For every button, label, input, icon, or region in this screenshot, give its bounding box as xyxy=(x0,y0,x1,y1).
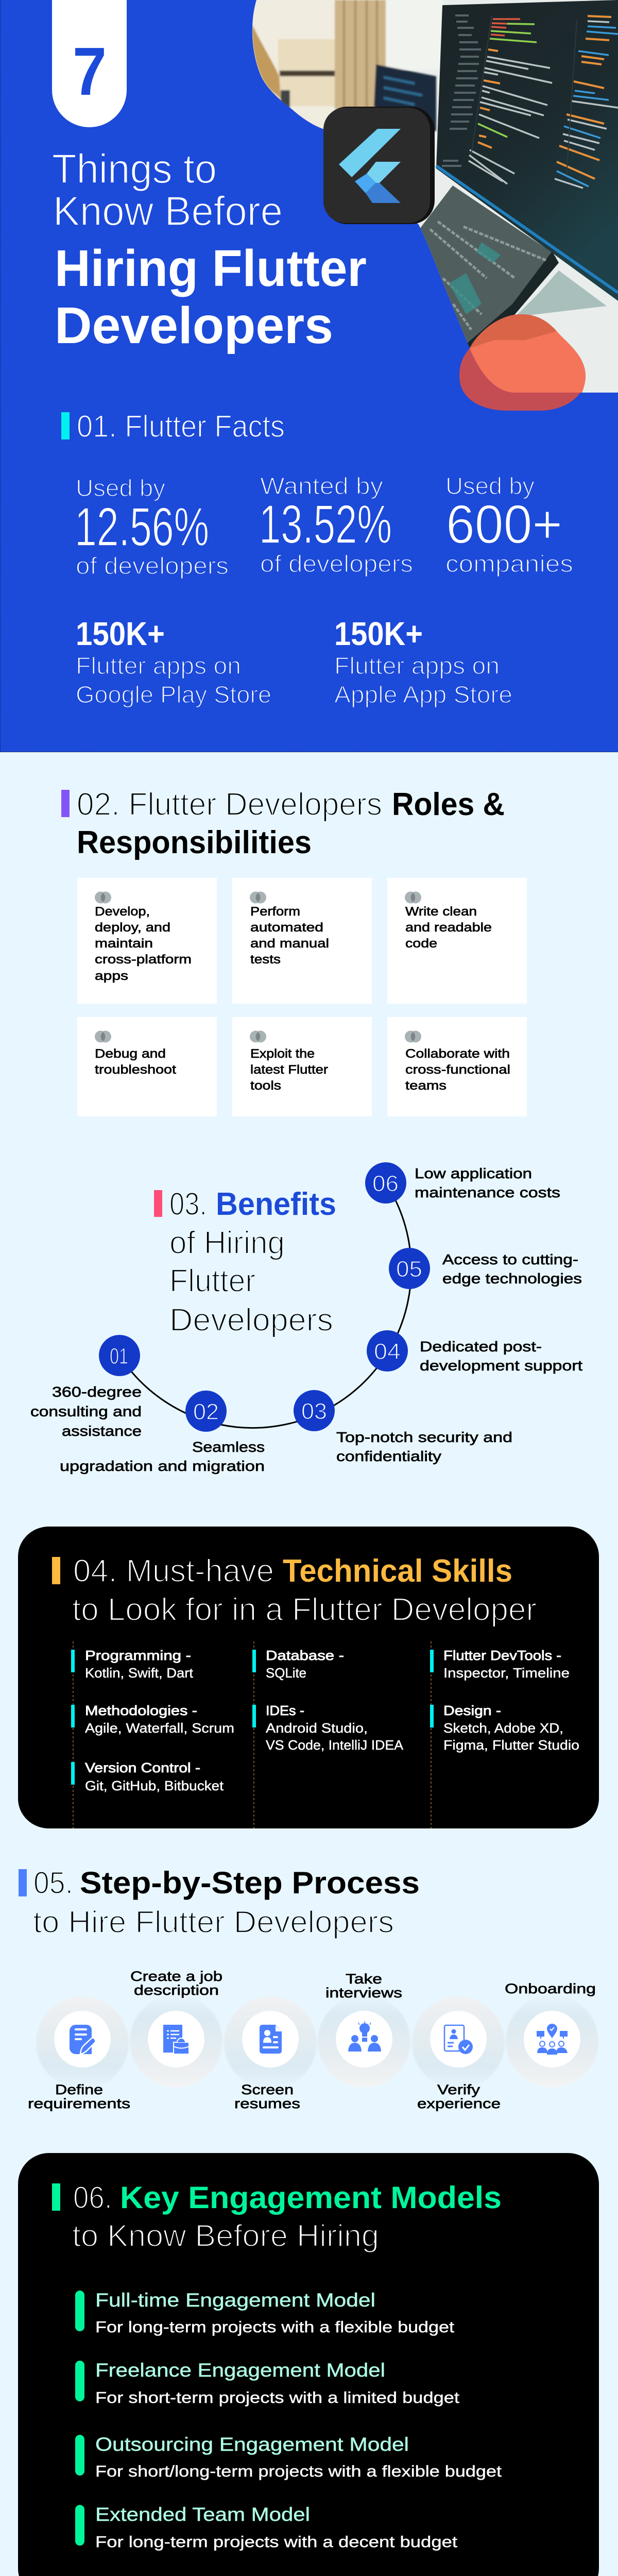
benefit 04: Dedicated post- xyxy=(420,1338,542,1354)
stat: apple app store apps: Apple App Store xyxy=(334,681,512,708)
step 6: onboarding xyxy=(505,1981,596,2067)
step halo rings xyxy=(36,1995,598,2089)
skill: programming: Kotlin, Swift, Dart xyxy=(85,1665,194,1681)
model: outsourcing: For short/long-term projects with a flexible budget xyxy=(95,2462,502,2480)
panel: role card tools: Exploit the xyxy=(250,1047,315,1061)
chart: hiring process steps xyxy=(28,1969,598,2111)
stat: google play store apps: Flutter apps on xyxy=(76,652,241,679)
title: Things to xyxy=(52,146,217,192)
panel: role card test: automated xyxy=(250,921,323,935)
panel: role card code: code xyxy=(405,937,437,951)
step 3: screen resumes xyxy=(234,2011,300,2111)
title: Developers xyxy=(55,297,333,354)
skill: database: SQLite xyxy=(266,1665,306,1681)
stat: used by 600+ companies: 600+ xyxy=(446,494,562,555)
stat: wanted by 13.52% of developers: Wanted by xyxy=(260,472,383,499)
heading: 05 step-by-step process: to Hire Flutter Developers xyxy=(33,1905,394,1939)
skill: flutter devtools xyxy=(430,1648,570,1681)
step 1: define requirements: Define xyxy=(55,2082,103,2097)
model: full-time xyxy=(75,2290,454,2336)
heading: 06 key engagement models xyxy=(52,2180,502,2253)
model: freelance xyxy=(75,2360,459,2406)
benefit 05: edge technologies xyxy=(442,1270,582,1286)
panel: 04 technical skills xyxy=(18,1527,599,1828)
stat: wanted by 13.52% of developers xyxy=(259,472,413,577)
title: Know Before xyxy=(53,188,283,234)
panel: role card collaborate xyxy=(387,1017,527,1116)
skill: programming: Programming - xyxy=(85,1648,191,1663)
model: freelance: For short-term projects with a limited budget xyxy=(95,2388,459,2406)
step 4: take interviews xyxy=(325,1971,402,2067)
heading: 02 roles and responsibilities: Roles & xyxy=(392,787,505,822)
panel: hero and flutter facts xyxy=(0,0,618,752)
stat: wanted by 13.52% of developers: 13.52% xyxy=(259,494,392,555)
benefit 06: Low application xyxy=(415,1165,532,1181)
heading: 06 key engagement models: Key Engagement Models xyxy=(120,2180,502,2215)
icon: overlapping circles xyxy=(405,891,421,904)
skill: IDEs: VS Code, IntelliJ IDEA xyxy=(266,1737,404,1753)
skill: methodologies: Agile, Waterfall, Scrum xyxy=(85,1720,234,1736)
benefit 01: consulting and xyxy=(30,1403,142,1419)
benefit 04 xyxy=(367,1330,582,1374)
skill: IDEs: Android Studio, xyxy=(266,1720,368,1736)
icon: overlapping circles xyxy=(250,1030,266,1043)
benefit 03: confidentiality xyxy=(336,1448,441,1464)
panel: role card tools xyxy=(232,1017,372,1116)
icon: flutter logo badge xyxy=(323,107,435,224)
stat: google play store apps: 150K+ xyxy=(76,615,165,652)
heading: 05 step-by-step process xyxy=(19,1866,420,1939)
panel: role card develop: apps xyxy=(95,969,128,983)
stat: apple app store apps: Flutter apps on xyxy=(334,652,500,679)
panel: role card code xyxy=(387,878,527,1004)
skill: design: Sketch, Adobe XD, xyxy=(443,1720,563,1736)
icon: document and briefcase xyxy=(163,2025,189,2054)
step 5: verify experience: Verify xyxy=(437,2082,480,2097)
panel: role card collaborate: cross-functional xyxy=(405,1063,510,1077)
stat: apple app store apps xyxy=(334,615,512,708)
panel: role card code: Write clean xyxy=(405,905,477,919)
skill: design: Design - xyxy=(443,1703,501,1718)
skill: database: Database - xyxy=(266,1648,344,1663)
step 3: screen resumes: resumes xyxy=(234,2096,300,2111)
hero photo: developer monitors xyxy=(247,0,618,397)
benefit 05: Access to cutting- xyxy=(442,1251,578,1267)
benefit 04: 04 xyxy=(374,1339,401,1364)
heading: 01 flutter facts: 01. Flutter Facts xyxy=(77,409,285,444)
skill: flutter devtools: Inspector, Timeline xyxy=(443,1665,570,1681)
stat: google play store apps xyxy=(76,615,271,708)
badge: number 7: 7 xyxy=(73,33,107,109)
step 4: take interviews: Take xyxy=(346,1971,382,1987)
heading: 03 benefits: of Hiring xyxy=(169,1225,285,1261)
skill: IDEs: IDEs - xyxy=(266,1703,304,1718)
step 2: create a job description xyxy=(130,1969,222,2067)
skill: flutter devtools: Flutter DevTools - xyxy=(443,1648,561,1663)
icon: bulb and two people xyxy=(348,2021,381,2052)
heading: 02 roles and responsibilities: Responsibilities xyxy=(77,825,312,860)
panel: role card develop xyxy=(77,878,217,1004)
stat: used by 12.56% of developers: Used by xyxy=(76,474,165,501)
benefit 01 xyxy=(30,1335,142,1439)
icon: overlapping circles xyxy=(250,891,266,904)
benefit 02: Seamless xyxy=(192,1439,265,1455)
icon: clipboard and pencil xyxy=(70,2025,96,2054)
benefit 03: Top-notch security and xyxy=(336,1429,512,1445)
skill: database xyxy=(252,1648,344,1681)
heading: 03 benefits: Benefits xyxy=(216,1187,336,1222)
stat: google play store apps: Google Play Store xyxy=(76,681,271,708)
benefit 02: upgradation and migration xyxy=(60,1458,265,1474)
heading: 04 must-have technical skills: 04. Must-have xyxy=(73,1553,274,1589)
step 1: define requirements: requirements xyxy=(28,2096,130,2111)
benefit 02: 02 xyxy=(193,1399,219,1425)
heading: 05 step-by-step process: 05. xyxy=(33,1866,73,1900)
benefit 03: 03 xyxy=(301,1399,327,1424)
heading: 03 benefits xyxy=(154,1187,336,1338)
stat: used by 600+ companies: Used by xyxy=(445,472,535,499)
skill: design xyxy=(430,1703,579,1753)
heading: 03 benefits: 03. xyxy=(169,1187,207,1222)
skill: methodologies: Methodologies - xyxy=(85,1703,197,1718)
stat: used by 12.56% of developers: 12.56% xyxy=(75,497,209,557)
skill: IDEs xyxy=(252,1703,404,1753)
benefit 01: assistance xyxy=(62,1423,142,1439)
panel: role card tools: latest Flutter xyxy=(250,1063,328,1077)
heading: 05 step-by-step process: Step-by-Step Process xyxy=(80,1866,420,1900)
panel: role card test: Perform xyxy=(250,905,300,919)
skill: version control xyxy=(71,1760,224,1793)
step 4: take interviews: interviews xyxy=(325,1985,402,2001)
step 2: create a job description: Create a job xyxy=(130,1969,222,1984)
heading: 06 key engagement models: to Know Before Hiring xyxy=(72,2218,379,2253)
heading: 03 benefits: Flutter xyxy=(169,1263,255,1299)
panel: role card tools: tools xyxy=(250,1079,281,1093)
title: Hiring Flutter xyxy=(55,240,367,297)
skill: methodologies xyxy=(71,1703,234,1736)
icon: resume document xyxy=(260,2025,282,2054)
panel: role card debug xyxy=(77,1017,217,1116)
icon: profile card and check xyxy=(444,2025,473,2054)
decorative red blob xyxy=(459,314,586,411)
panel: role card test xyxy=(232,878,372,1004)
title xyxy=(52,146,367,354)
model: freelance: Freelance Engagement Model xyxy=(95,2360,385,2381)
heading: 04 must-have technical skills: to Look for in a Flutter Developer xyxy=(72,1592,537,1628)
skill: design: Figma, Flutter Studio xyxy=(443,1737,579,1753)
benefit 04: development support xyxy=(420,1358,582,1374)
step 2: create a job description: description xyxy=(134,1982,219,1998)
panel: role card collaborate: Collaborate with xyxy=(405,1047,510,1061)
panel: role card develop: Develop, xyxy=(95,905,150,919)
model: extended team xyxy=(75,2504,457,2551)
stat: used by 600+ companies xyxy=(445,472,573,577)
panel: 06 key engagement models xyxy=(18,2153,599,2576)
stat: used by 12.56% of developers: of developers xyxy=(76,552,229,579)
panel: role card test: tests xyxy=(250,953,281,967)
panel: role card develop: deploy, and xyxy=(95,921,170,935)
heading: 04 must-have technical skills xyxy=(52,1553,537,1628)
benefit 02 xyxy=(60,1391,265,1474)
heading: 04 must-have technical skills: Technical Skills xyxy=(283,1553,512,1589)
panel: role card develop: maintain xyxy=(95,937,153,951)
benefit 06: maintenance costs xyxy=(415,1184,560,1200)
icon: overlapping circles xyxy=(405,1030,421,1043)
benefit 06 xyxy=(365,1162,560,1204)
benefit 03 xyxy=(294,1390,512,1464)
skill: version control: Version Control - xyxy=(85,1760,200,1775)
step 1: define requirements xyxy=(28,2011,130,2111)
benefit 06: 06 xyxy=(372,1171,399,1196)
chart: benefits timeline arc xyxy=(30,1162,582,1474)
panel: role card test: and manual xyxy=(250,937,329,951)
step 3: screen resumes: Screen xyxy=(241,2082,294,2097)
model: full-time: Full-time Engagement Model xyxy=(95,2290,375,2311)
heading: 02 roles and responsibilities xyxy=(61,787,505,860)
heading: 06 key engagement models: 06. xyxy=(73,2180,112,2215)
icon: overlapping circles xyxy=(95,1030,111,1043)
benefit 05 xyxy=(389,1248,582,1289)
benefit 01: 01 xyxy=(110,1344,128,1369)
benefit 01: 360-degree xyxy=(52,1384,142,1400)
model: full-time: For long-term projects with a flexible budget xyxy=(95,2318,454,2336)
model: outsourcing xyxy=(75,2434,502,2480)
stat: used by 600+ companies: companies xyxy=(445,550,573,577)
skill: version control: Git, GitHub, Bitbucket xyxy=(85,1778,224,1793)
model: extended team: Extended Team Model xyxy=(95,2504,310,2525)
stat: apple app store apps: 150K+ xyxy=(334,615,423,652)
heading: 03 benefits: Developers xyxy=(169,1302,333,1338)
panel: role card collaborate: teams xyxy=(405,1079,447,1093)
model: outsourcing: Outsourcing Engagement Model xyxy=(95,2434,409,2455)
skill: programming xyxy=(71,1648,194,1681)
panel: role card debug: Debug and xyxy=(95,1047,166,1061)
step 5: verify experience xyxy=(417,2011,501,2111)
stat: wanted by 13.52% of developers: of developers xyxy=(260,550,413,577)
heading: 02 roles and responsibilities: 02. Flutter Developers xyxy=(77,787,382,822)
icon: team with speech bubbles xyxy=(537,2024,568,2055)
step 6: onboarding: Onboarding xyxy=(505,1981,596,1996)
step 5: verify experience: experience xyxy=(417,2096,501,2111)
icon: overlapping circles xyxy=(95,891,111,904)
stat: used by 12.56% of developers xyxy=(75,474,229,579)
model: extended team: For long-term projects with a decent budget xyxy=(95,2533,457,2551)
panel: role card code: and readable xyxy=(405,921,492,935)
benefit 05: 05 xyxy=(396,1257,422,1282)
panel: role card debug: troubleshoot xyxy=(95,1063,176,1077)
badge: number 7 xyxy=(52,0,127,127)
panel: role card develop: cross-platform xyxy=(95,953,192,967)
